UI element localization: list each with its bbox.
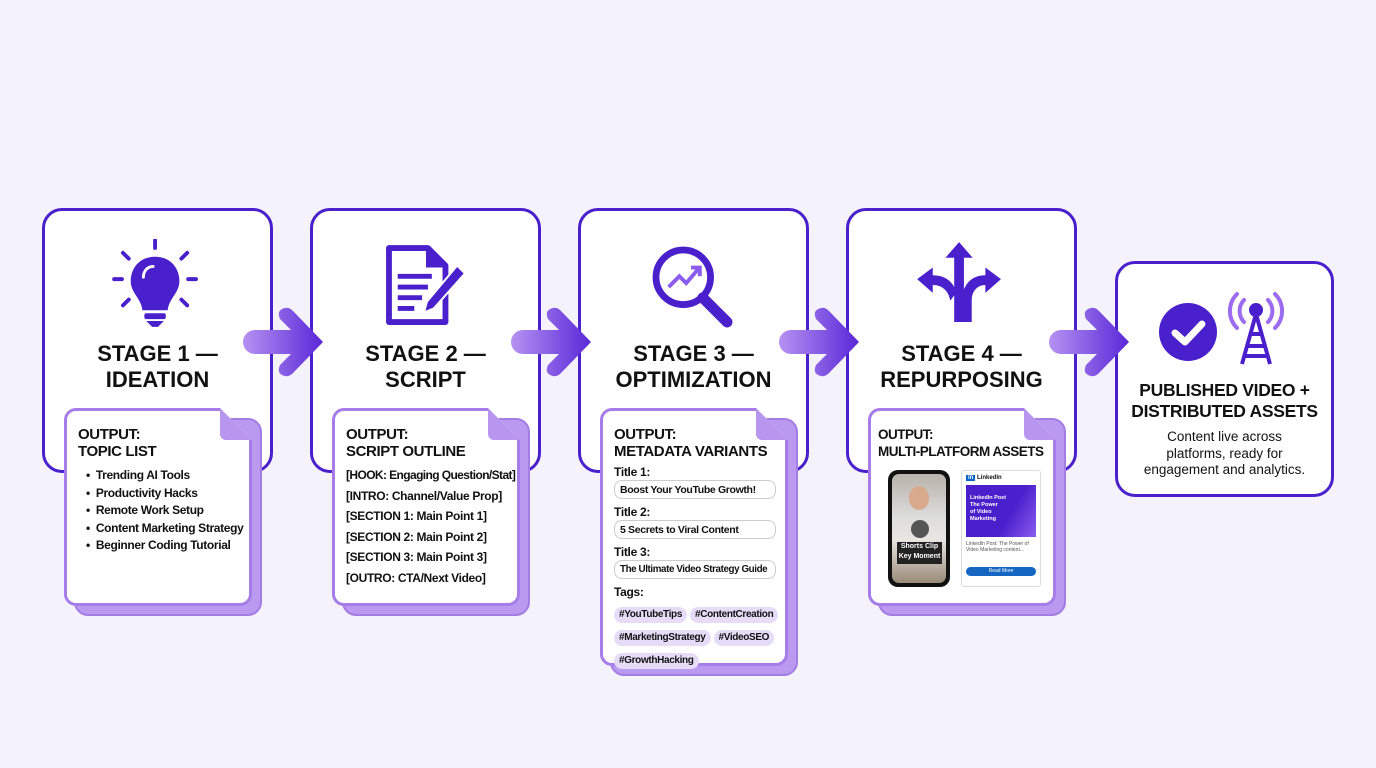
panel: stage 4: [846, 208, 1077, 473]
panel: stage 2: [310, 208, 541, 473]
heading: [615, 341, 772, 392]
doc: metadata variants: The Ultimate Video Strategy Guide: [620, 564, 767, 575]
doc: script outline: [HOOK: Engaging Question/Stat]: [346, 468, 515, 482]
doc: script outline: [OUTRO: CTA/Next Video]: [346, 570, 486, 584]
heading: [97, 341, 218, 392]
linkedin card: Read More: [989, 568, 1013, 574]
doc: metadata variants: METADATA VARIANTS: [614, 443, 767, 460]
heading: [365, 341, 486, 392]
heading: IDEATION: [106, 367, 209, 392]
doc: script outline: OUTPUT:: [346, 426, 408, 443]
doc: script outline: SCRIPT OUTLINE: [346, 443, 465, 460]
arrow 4: [1049, 308, 1129, 376]
heading: STAGE 2 —: [365, 341, 486, 366]
doc: script outline: [SECTION 2: Main Point 2]: [346, 530, 487, 544]
doc: script outline: [SECTION 1: Main Point 1]: [346, 509, 487, 523]
heading: [880, 341, 1043, 392]
arrow 1: [243, 308, 323, 376]
icon: check circle and tower: [1159, 292, 1284, 364]
doc: metadata variants: #MarketingStrategy: [619, 632, 706, 643]
doc: metadata variants: Boost Your YouTube Growth!: [620, 484, 756, 496]
heading: STAGE 4 —: [901, 341, 1022, 366]
doc: metadata variants: #ContentCreation: [695, 609, 773, 620]
doc: script outline: [SECTION 3: Main Point 3]: [346, 550, 487, 564]
doc: metadata variants: #YouTubeTips: [619, 609, 682, 620]
doc: metadata variants: #VideoSEO: [719, 632, 769, 643]
doc: metadata variants: Tags:: [614, 585, 644, 599]
heading: OPTIMIZATION: [615, 367, 772, 392]
description: Content live across: [1167, 429, 1282, 444]
heading: SCRIPT: [385, 367, 466, 392]
doc: topic list: [64, 408, 262, 616]
heading: DISTRIBUTED ASSETS: [1131, 401, 1318, 421]
doc: topic list: OUTPUT:: [78, 426, 140, 443]
linkedin card: [961, 470, 1041, 587]
heading: STAGE 3 —: [633, 341, 754, 366]
linkedin card: The Power: [970, 502, 998, 508]
heading: [1131, 380, 1318, 421]
doc: topic list: • Trending AI Tools: [86, 468, 190, 482]
doc: metadata variants: Title 3:: [614, 545, 650, 559]
doc: metadata variants: Title 1:: [614, 465, 650, 479]
icon: split arrows: [917, 242, 1001, 322]
linkedin card: in LinkedIn: [968, 475, 1002, 481]
description: [1144, 429, 1305, 477]
phone mockup: Shorts Clip: [901, 543, 938, 550]
doc: topic list: TOPIC LIST: [78, 443, 156, 460]
panel: stage 3: [578, 208, 809, 473]
linkedin card: LinkedIn Post: The Power of Video Marketing content...: [966, 541, 1029, 553]
doc: script outline: [332, 408, 530, 616]
panel: stage 1: [42, 208, 273, 473]
heading: STAGE 1 —: [97, 341, 218, 366]
doc: metadata variants: #GrowthHacking: [619, 655, 694, 666]
description: engagement and analytics.: [1144, 462, 1305, 477]
icon: document pencil: [386, 245, 464, 325]
doc: multi-platform assets: OUTPUT:: [878, 427, 933, 442]
heading: PUBLISHED VIDEO +: [1139, 380, 1310, 400]
icon: magnifier with trend: [652, 246, 732, 328]
linkedin card: Marketing: [970, 516, 996, 522]
phone mockup: Key Moment: [899, 553, 940, 560]
doc: metadata variants: [600, 408, 798, 676]
doc: topic list: • Productivity Hacks: [86, 486, 198, 500]
doc: topic list: • Content Marketing Strategy: [86, 520, 243, 534]
panel: final output: [1115, 261, 1334, 497]
doc: topic list: • Remote Work Setup: [86, 503, 204, 517]
doc: multi-platform assets: MULTI-PLATFORM ASSETS: [878, 444, 1043, 459]
doc: metadata variants: 5 Secrets to Viral Content: [620, 524, 738, 536]
phone mockup: [888, 470, 950, 587]
arrow 3: [779, 308, 859, 376]
heading: REPURPOSING: [880, 367, 1043, 392]
doc: metadata variants: Title 2:: [614, 505, 650, 519]
doc: multi-platform assets: [868, 408, 1066, 616]
doc: metadata variants: OUTPUT:: [614, 426, 676, 443]
linkedin card: LinkedIn Post: [970, 495, 1006, 501]
icon: light bulb: [112, 239, 198, 327]
linkedin card: of Video: [970, 509, 992, 515]
arrow 2: [511, 308, 591, 376]
doc: script outline: [INTRO: Channel/Value Prop]: [346, 488, 502, 502]
doc: topic list: • Beginner Coding Tutorial: [86, 538, 231, 552]
description: platforms, ready for: [1166, 446, 1283, 460]
